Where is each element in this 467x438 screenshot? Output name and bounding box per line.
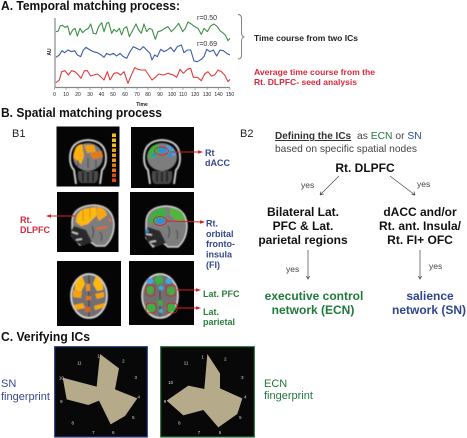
axis tick labels: 60 — [122, 92, 128, 98]
axis tick labels: 20 — [75, 92, 81, 98]
label: yes down left: yes — [286, 264, 299, 274]
arrow: down right — [418, 250, 422, 279]
line chart: time courses: r=0.50 — [197, 15, 217, 22]
radar: ECN fingerprint — [161, 347, 254, 437]
radar: SN fingerprint: 2 — [122, 358, 125, 363]
flow node: dACC: dACC and/or — [383, 205, 457, 219]
result: salience network — [392, 289, 466, 317]
axis tick labels: 70 — [134, 92, 140, 98]
flow node: Rt. DLPFC: Rt. DLPFC — [335, 161, 395, 175]
line chart: time courses: Time — [136, 102, 148, 108]
label: Rt. orbital fronto-insula: insula — [206, 250, 233, 260]
radar: SN fingerprint — [55, 347, 147, 437]
brain panel 2: coronal green blue — [131, 127, 194, 188]
label: B2: B2 — [240, 128, 253, 140]
text: defining the ICs: Defining the ICs as ECN or SN — [275, 131, 422, 142]
axis tick labels: 110 — [179, 92, 187, 98]
text: time course from two ICs: Time course from two ICs — [254, 33, 358, 43]
axis tick labels: 30 — [87, 92, 93, 98]
arrows: red region pointers — [46, 150, 205, 310]
text: defining the ICs: based on specific spatial nodes — [275, 144, 417, 155]
label: Rt dACC: dACC — [205, 158, 230, 168]
label: Lat. parietal: Lat. — [203, 307, 219, 317]
arrow: right yes — [390, 176, 415, 195]
label: B1: B1 — [12, 128, 25, 140]
line chart: time courses: AU — [47, 48, 53, 56]
radar: SN fingerprint: 8 — [71, 421, 74, 426]
label: Lat. parietal — [203, 307, 235, 327]
heading: B. Spatial matching process: B. Spatial matching process — [1, 106, 162, 120]
axis tick labels — [53, 92, 234, 98]
line chart: time courses: r=0.69 — [197, 41, 217, 48]
radar: ECN fingerprint: 10 — [168, 380, 174, 385]
result: executive control network: executive control — [265, 289, 363, 303]
radar: SN fingerprint: 7 — [92, 430, 95, 435]
flow node: bilateral: parietal regions — [258, 233, 348, 247]
label: Rt dACC: Rt — [205, 148, 214, 158]
axis tick labels: 100 — [168, 92, 176, 98]
label: Rt. orbital fronto-insula: (FI) — [206, 260, 220, 270]
flow node: bilateral: PFC & Lat. — [273, 219, 333, 233]
radar: SN fingerprint: 10 — [59, 376, 64, 381]
axis tick labels: 130 — [203, 92, 211, 98]
label: Rt. orbital fronto-insula: fronto- — [206, 239, 235, 249]
label: Rt. DLPFC: DLPFC — [20, 225, 50, 235]
label: yes left: yes — [301, 180, 314, 190]
label: SN fingerprint — [1, 378, 50, 403]
flow node: dACC: Rt. FI+ OFC — [387, 233, 453, 247]
icon: brace — [238, 14, 244, 59]
radar: ECN fingerprint: 6 — [219, 430, 222, 435]
axis tick labels: 10 — [63, 92, 69, 98]
radar: ECN fingerprint: 7 — [198, 430, 201, 435]
flow node: dACC: Rt. ant. Insula/ — [379, 219, 462, 233]
brain panel 4: sagittal green blue — [130, 192, 194, 255]
label: yes right: yes — [417, 179, 430, 189]
label: Rt dACC — [205, 148, 230, 168]
result: executive control network — [265, 289, 363, 317]
label: Lat. parietal: parietal — [203, 317, 235, 327]
radar: ECN fingerprint: 8 — [178, 421, 181, 426]
radar: SN fingerprint: 5 — [132, 415, 135, 420]
brain panel 5: axial orange — [57, 261, 121, 326]
line chart: time courses — [47, 15, 234, 108]
label: Rt. orbital fronto-insula: orbital — [206, 229, 234, 239]
label: ECN fingerprint — [264, 378, 313, 402]
label: ECN fingerprint: ECN — [264, 378, 287, 390]
green IC line — [56, 22, 230, 41]
brain panel 1: coronal orange — [56, 126, 120, 186]
radar: SN fingerprint: 9 — [60, 399, 63, 404]
label: Rt. DLPFC — [20, 215, 50, 235]
label: ECN fingerprint: fingerprint — [264, 390, 313, 402]
red seed line — [56, 68, 230, 83]
radar: ECN fingerprint: 1 — [201, 355, 204, 360]
radar: ECN fingerprint: 4 — [244, 395, 247, 400]
axis tick labels: 80 — [145, 92, 151, 98]
radar: ECN fingerprint: 5 — [239, 415, 242, 420]
axis tick labels: 0 — [53, 92, 56, 98]
radar: SN fingerprint: 3 — [134, 375, 137, 380]
result: salience network: salience — [406, 289, 454, 303]
arrow: down left — [306, 250, 310, 279]
text: average time course — [254, 67, 375, 87]
result: executive control network: network (ECN) — [272, 303, 354, 317]
brain panel 6: axial green blue — [129, 261, 194, 325]
radar: SN fingerprint: 11 — [77, 361, 82, 366]
axis tick labels: 40 — [99, 92, 104, 98]
label: SN fingerprint: fingerprint — [1, 391, 50, 403]
radar: ECN fingerprint: 3 — [241, 375, 244, 380]
radar: ECN fingerprint: 11 — [184, 361, 189, 366]
axis tick labels: 140 — [214, 92, 223, 98]
flow node: bilateral: Bilateral Lat. — [267, 205, 339, 219]
blue IC line — [56, 45, 230, 62]
label: Rt. orbital fronto-insula — [206, 218, 235, 270]
axis tick labels: 90 — [157, 92, 163, 98]
radar: SN fingerprint: 4 — [137, 395, 140, 400]
text: average time course: Average time course from the — [254, 67, 375, 77]
label: SN fingerprint: SN — [1, 378, 16, 390]
heading: C. Verifying ICs: C. Verifying ICs — [1, 330, 90, 344]
flow node: dACC — [379, 205, 462, 247]
label: Rt. DLPFC: Rt. — [20, 215, 32, 225]
label: Rt. orbital fronto-insula: Rt. — [206, 218, 218, 228]
text: average time course: Rt. DLPFC- seed analysis — [254, 77, 357, 87]
result: salience network: network (SN) — [392, 303, 466, 317]
flow node: bilateral — [258, 205, 348, 247]
radar: ECN fingerprint: 2 — [224, 356, 227, 361]
radar: SN fingerprint: 1 — [97, 353, 100, 358]
radar: ECN fingerprint: 9 — [164, 399, 167, 404]
label: yes down right: yes — [429, 261, 442, 271]
axis tick labels: 150 — [226, 92, 234, 98]
label: Lat. PFC: Lat. PFC — [203, 289, 240, 299]
text: defining the ICs — [275, 131, 422, 155]
axis tick labels: 120 — [191, 92, 199, 98]
brain panel 3: sagittal orange — [57, 192, 118, 252]
arrow: left yes — [320, 176, 339, 195]
radar: SN fingerprint: 6 — [112, 430, 115, 435]
axis tick labels: 50 — [110, 92, 116, 98]
